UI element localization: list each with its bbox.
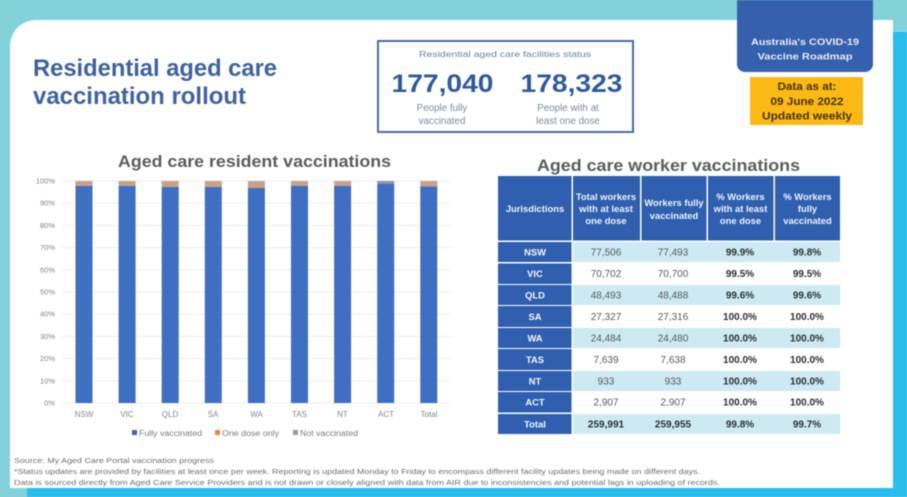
y axis labels: 80% — [40, 221, 55, 230]
row: ACT: 2,907 — [593, 398, 619, 408]
footnotes: *Status updates are provided by facilities at least once per week. Reporting is updated Monday to Friday to encompass different facility updates being made on different days. — [14, 467, 700, 476]
row: TAS — [498, 349, 824, 370]
stat: people fully vaccinated: People fully — [417, 103, 467, 114]
x axis labels: ACT — [378, 410, 394, 419]
row: VIC: VIC — [527, 268, 543, 279]
row: SA: 100.0% — [723, 312, 757, 323]
row: WA — [498, 328, 840, 348]
row: NT: NT — [529, 376, 542, 386]
title: vaccination rollout — [33, 83, 246, 110]
table header: % Workers — [783, 191, 832, 202]
y axis labels: 50% — [40, 288, 55, 296]
y axis labels — [36, 176, 55, 408]
row: VIC: 99.5% — [793, 269, 821, 280]
stat: people with at least one dose: People with at — [537, 103, 599, 114]
row: QLD: 99.6% — [726, 290, 754, 302]
legend: Fully vaccinated — [139, 429, 202, 438]
row: NT: 100.0% — [723, 376, 757, 388]
row: WA: 24,480 — [658, 334, 689, 344]
row: TAS: TAS — [526, 354, 544, 365]
row: NT: 100.0% — [790, 376, 824, 388]
x axis labels: QLD — [162, 410, 178, 419]
row: NSW: 77,493 — [658, 248, 689, 258]
table header: one dose — [720, 215, 761, 226]
row: SA — [498, 306, 824, 327]
stat: people with at least one dose: least one dose — [536, 116, 600, 127]
y axis labels: 40% — [40, 310, 55, 319]
row: ACT: 2,907 — [660, 398, 686, 408]
table header: vaccinated — [783, 215, 832, 226]
stat: people fully vaccinated: vaccinated — [419, 116, 465, 127]
stat: people fully vaccinated — [392, 70, 494, 127]
row: QLD: 99.6% — [793, 290, 821, 302]
row: SA: 27,327 — [591, 312, 622, 323]
y axis labels: 70% — [40, 243, 55, 252]
x axis labels — [75, 410, 438, 419]
row: NSW: NSW — [524, 246, 546, 258]
row: Total: 259,991 — [588, 420, 625, 430]
row: ACT: 100.0% — [723, 398, 757, 408]
footnotes — [14, 456, 720, 487]
row: Total: 99.7% — [793, 420, 821, 430]
row: WA: WA — [527, 332, 543, 344]
legend — [132, 429, 358, 438]
title — [33, 55, 277, 110]
row: ACT: ACT — [525, 396, 545, 408]
data date callout — [750, 77, 863, 125]
roadmap tab: Vaccine Roadmap — [758, 52, 853, 62]
title: Residential aged care — [33, 55, 277, 82]
table: worker vaccinations — [498, 176, 840, 434]
legend: One dose only — [222, 429, 279, 438]
row: NSW — [498, 242, 840, 262]
table header: one dose — [585, 215, 627, 226]
row: TAS: 100.0% — [790, 355, 824, 366]
stat: people with at least one dose: 178,323 — [520, 70, 622, 98]
bar chart: resident vaccinations — [36, 176, 451, 438]
y axis labels: 0% — [44, 398, 55, 408]
row: Total: Total — [524, 418, 546, 430]
row: Total — [498, 414, 840, 434]
roadmap tab: Australia's COVID-19 — [751, 37, 859, 47]
row: QLD — [498, 285, 840, 305]
data date callout: Data as at: — [778, 81, 836, 93]
worker table heading: Aged care worker vaccinations — [537, 156, 800, 175]
panel: facilities status — [378, 41, 633, 132]
row: SA: 27,316 — [658, 312, 689, 323]
footnotes: Source: My Aged Care Portal vaccination progress — [14, 456, 214, 465]
row: QLD: QLD — [525, 290, 545, 300]
data date callout: Updated weekly — [762, 110, 853, 122]
row: NT: 933 — [665, 376, 682, 388]
data date callout: 09 June 2022 — [770, 96, 844, 108]
row: QLD: 48,488 — [658, 290, 689, 302]
row: QLD: 48,493 — [591, 290, 622, 302]
row: VIC: 70,702 — [591, 269, 622, 280]
row: Total: 259,955 — [655, 420, 692, 430]
x axis labels: Total — [421, 410, 438, 419]
y axis labels: 90% — [40, 199, 55, 208]
y axis labels: 30% — [40, 332, 55, 341]
x axis labels: NT — [337, 410, 348, 419]
row: TAS: 7,639 — [593, 355, 619, 366]
x axis labels: WA — [250, 410, 263, 419]
table header: Jurisdictions — [506, 203, 564, 214]
row: WA: 100.0% — [790, 334, 824, 344]
table header: Workers fully — [644, 197, 704, 208]
roadmap tab — [737, 0, 873, 72]
table header — [498, 176, 840, 240]
x axis labels: NSW — [75, 410, 94, 419]
bars — [76, 181, 437, 403]
x axis labels: VIC — [120, 410, 134, 419]
x axis labels: TAS — [292, 410, 307, 419]
table header: with at least — [578, 203, 633, 214]
y axis labels: 20% — [40, 354, 55, 363]
row: VIC: 99.5% — [726, 269, 754, 280]
y axis labels: 10% — [40, 376, 55, 385]
stat: people fully vaccinated: 177,040 — [392, 70, 494, 98]
row: ACT — [498, 392, 824, 412]
row: TAS: 7,638 — [660, 355, 686, 366]
row: SA: SA — [528, 311, 542, 322]
table header: % Workers — [716, 191, 765, 202]
row: NT: 933 — [598, 376, 615, 388]
row: TAS: 100.0% — [723, 355, 757, 366]
stat: people with at least one dose — [520, 70, 622, 127]
y axis labels: 60% — [40, 265, 55, 274]
row: NT — [498, 371, 840, 391]
table header: Total workers — [576, 191, 636, 202]
row: ACT: 100.0% — [790, 398, 824, 408]
x axis labels: SA — [208, 410, 219, 419]
row: NSW: 99.8% — [793, 248, 821, 258]
status heading: Residential aged care facilities status — [419, 49, 592, 59]
row: NSW: 99.9% — [726, 248, 754, 258]
row: VIC — [498, 264, 821, 284]
resident chart heading: Aged care resident vaccinations — [118, 152, 391, 171]
row: NSW: 77,506 — [591, 248, 622, 258]
table header: vaccinated — [650, 210, 699, 221]
footnotes: Data is sourced directly from Aged Care Service Providers and is not drawn or closely aligned with data from AIR due to inconsistencies and potential lags in uploading of records. — [14, 478, 720, 487]
y axis labels: 100% — [36, 176, 55, 186]
legend: Not vaccinated — [300, 429, 358, 438]
row: VIC: 70,700 — [658, 269, 689, 280]
table header: fully — [798, 203, 818, 214]
row: WA: 100.0% — [723, 334, 757, 344]
row: WA: 24,484 — [591, 334, 622, 344]
table header: with at least — [713, 203, 767, 214]
row: SA: 100.0% — [790, 312, 824, 323]
row: Total: 99.8% — [726, 420, 754, 430]
